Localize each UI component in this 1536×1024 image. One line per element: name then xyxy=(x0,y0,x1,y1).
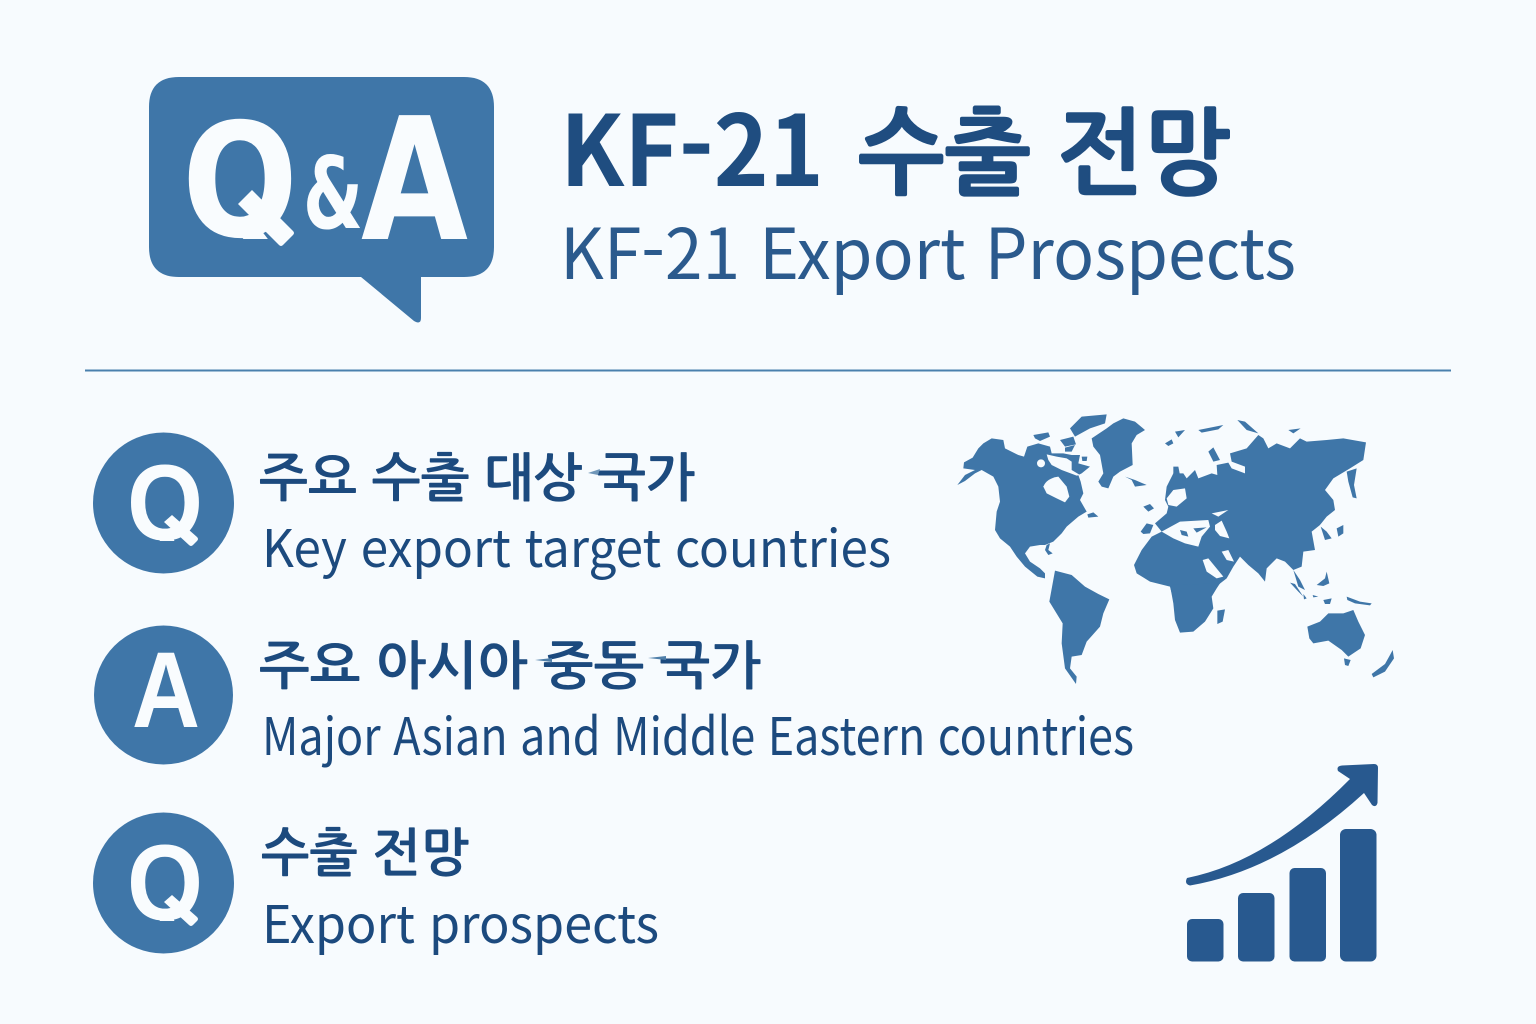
smudge xyxy=(588,469,600,475)
icon: Q circle xyxy=(93,432,234,574)
arrow xyxy=(1186,764,1378,886)
heading: key export targets Korean: 주요 수출 대상 국가 xyxy=(259,451,695,504)
icon: A circle: A xyxy=(132,629,200,750)
Eurasia and North Africa xyxy=(1134,420,1366,600)
icon: growth bar chart with arrow xyxy=(1186,764,1378,962)
item 1: Q badge and text xyxy=(93,432,891,582)
item 2: A badge and text xyxy=(94,626,1134,770)
icon: Q circle xyxy=(93,812,234,954)
icon: Q&A speech bubble: Q xyxy=(182,90,298,274)
icon: Q&A speech bubble: & xyxy=(303,135,363,252)
bars xyxy=(1187,829,1376,962)
text: key export targets English: Key export target countries xyxy=(262,507,891,582)
title: Korean: KF-21 xyxy=(560,73,824,215)
heading: Asian and Middle Eastern Korean: 주요 아시아 중동 국가 xyxy=(259,640,761,692)
icon: Q circle: Q xyxy=(127,822,203,943)
icon: Q circle: Q xyxy=(127,442,203,563)
text: Asian and Middle Eastern English: Major Asian and Middle Eastern countries xyxy=(262,695,1134,770)
subtitle: English: KF-21 Export Prospects xyxy=(560,199,1296,300)
icon: Q&A speech bubble xyxy=(149,77,494,322)
icon: world map xyxy=(957,414,1394,684)
divider xyxy=(85,370,1451,372)
title: Korean xyxy=(560,73,1230,215)
item 3: Q badge and text xyxy=(93,812,659,958)
icon: Q&A speech bubble: A xyxy=(361,82,468,280)
heading: export prospects Korean: 수출 전망 xyxy=(261,826,469,879)
title: Korean: 수출 전망 xyxy=(858,106,1230,201)
text: export prospects English: Export prospects xyxy=(262,883,659,958)
Southern continents and islands xyxy=(1049,571,1394,684)
icon: A circle xyxy=(94,626,233,764)
smudges xyxy=(535,656,666,662)
North America and Greenland xyxy=(957,414,1147,578)
